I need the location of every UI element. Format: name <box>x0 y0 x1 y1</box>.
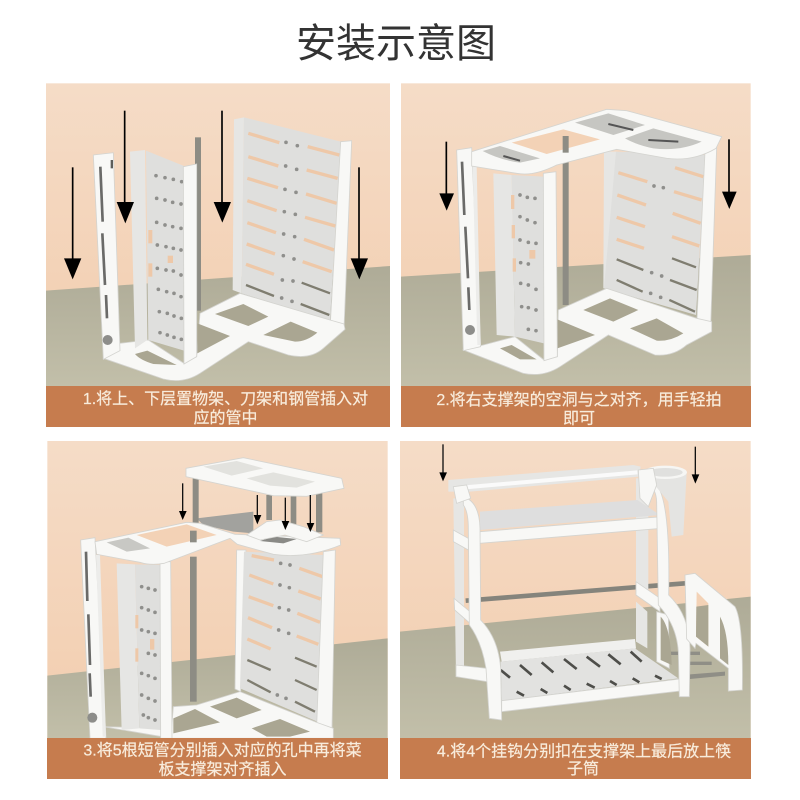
caption text: 即可 <box>563 410 595 428</box>
arrow <box>117 111 134 223</box>
caption bar <box>46 386 390 427</box>
arrow <box>439 444 447 481</box>
title: 安装示意图 <box>296 22 496 66</box>
panel: step 2 <box>401 83 751 427</box>
arrow <box>722 139 737 209</box>
step 4 illustration <box>400 441 751 738</box>
arrow <box>179 483 187 520</box>
arrow <box>307 495 314 532</box>
caption bar <box>400 738 751 779</box>
step 1 illustration <box>46 83 390 386</box>
caption text: 3.将5根短管分别插入对应的孔中再将菜 <box>83 740 362 760</box>
caption text: 1.将上、下层置物架、刀架和钢管插入对 <box>83 390 368 408</box>
caption text: 子筒 <box>567 760 599 778</box>
arrow <box>254 495 261 524</box>
caption text: 2.将右支撑架的空洞与之对齐，用手轻拍 <box>436 391 722 409</box>
step 2 illustration <box>401 83 751 386</box>
caption text: 4.将4个挂钩分别扣在支撑架上最后放上筷 <box>437 742 731 760</box>
panel: step 1 <box>46 83 390 427</box>
panel: step 3 <box>47 441 388 779</box>
arrow <box>439 142 454 211</box>
caption text: 应的管中 <box>193 408 258 427</box>
caption bar <box>47 738 388 779</box>
arrow <box>214 111 231 223</box>
arrow <box>282 498 289 530</box>
caption text: 板支撑架对齐插入 <box>158 760 287 778</box>
caption bar <box>401 386 751 427</box>
step 3 illustration <box>47 441 388 738</box>
arrow <box>692 447 699 484</box>
arrow <box>64 167 81 279</box>
panel: step 4 <box>400 441 751 779</box>
arrow <box>351 167 368 279</box>
